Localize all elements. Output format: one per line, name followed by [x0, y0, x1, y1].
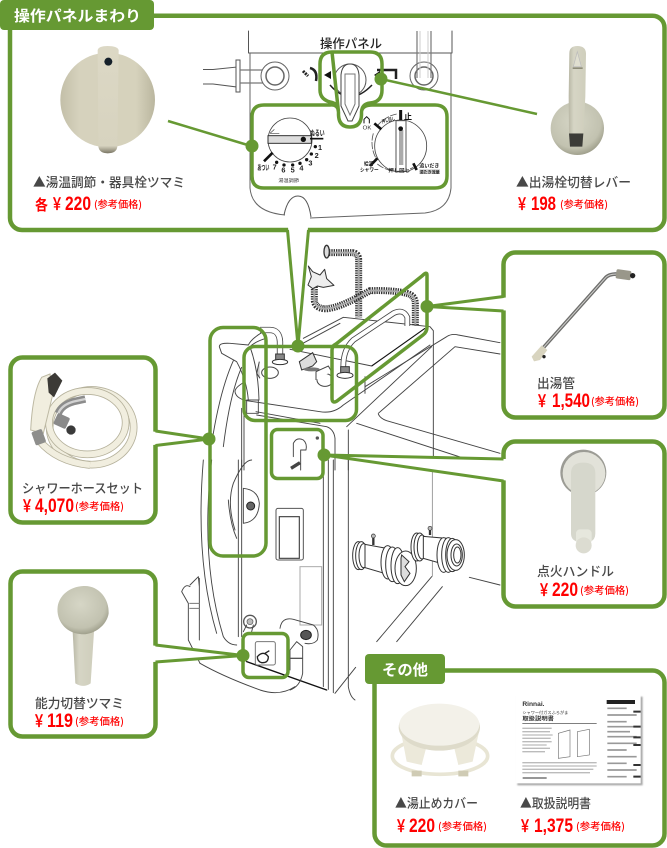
- connector dot: capacity switch: [236, 649, 250, 662]
- chart: temperature dial: 3: [308, 158, 312, 167]
- callout: highlight around capacity switch: [243, 634, 288, 678]
- connector dot: ignition handle: [318, 448, 330, 462]
- price: ignition handle: 220: [552, 579, 578, 601]
- price: temperature knob: [35, 190, 142, 215]
- panel: outlet pipe: [427, 252, 664, 418]
- price: ignition handle: ￥: [538, 576, 550, 601]
- chart: temperature dial: 湯温調節: [278, 177, 299, 184]
- icon: corrugated gas pipes: [308, 245, 415, 326]
- price: outlet lever: [516, 190, 608, 215]
- icon: shower hose photo: [31, 373, 134, 465]
- price: temperature knob: (参考価格): [94, 196, 142, 211]
- text: outlet lever label: ▲出湯栓切替レバー: [516, 172, 631, 191]
- chart: temperature dial: ぬるい: [310, 128, 325, 137]
- price: outlet pipe: (参考価格): [591, 393, 639, 408]
- price: cover: [395, 812, 487, 837]
- price: capacity switch: 119: [47, 710, 73, 732]
- diagram: control panel: 操作パネル: [320, 36, 382, 51]
- top of the heater: [212, 312, 500, 470]
- icon: instruction manual: シャワー付ガスふろがま: [522, 709, 568, 715]
- callout: highlight around outlet lever and dials: [252, 52, 447, 188]
- price: capacity switch: ￥: [33, 707, 45, 732]
- chart: function dial: 給湯: [364, 159, 374, 167]
- heading tab: others: その他: [382, 659, 428, 680]
- callout: highlight around ignition handle: [272, 430, 323, 478]
- chart: function dial: OK: [363, 125, 372, 131]
- chart: temperature dial: 1: [318, 143, 322, 152]
- icon: temperature knob photo: [60, 46, 155, 153]
- icon: capacity switch knob photo: [57, 586, 109, 686]
- icon: shower mark: [310, 68, 316, 81]
- price: ignition handle: (参考価格): [580, 582, 629, 597]
- icon: stopper cover photo: [392, 704, 488, 776]
- leader line: outlet lever: [381, 79, 537, 114]
- price: ignition handle: [538, 576, 629, 601]
- callout: highlight around knobs: [244, 346, 356, 420]
- price: cover: ￥: [395, 812, 407, 837]
- chart: function dial: 押し回し: [381, 115, 396, 125]
- price: manual: (参考価格): [576, 818, 625, 833]
- price: manual: [519, 812, 625, 837]
- text: outlet pipe label: 出湯管: [537, 373, 575, 392]
- text: capacity switch label: 能力切替ツマミ: [35, 693, 124, 712]
- price: outlet pipe: ￥: [536, 387, 548, 412]
- chart: temperature dial: 4: [299, 164, 304, 173]
- connector dot: outlet pipe: [420, 300, 434, 313]
- panel: ignition handle: [324, 442, 664, 606]
- chart: temperature dial: 2: [315, 151, 319, 160]
- chart: function dial: [360, 110, 440, 174]
- text: shower hose label: シャワーホースセット: [22, 478, 143, 497]
- price: capacity switch: (参考価格): [75, 713, 124, 728]
- price: capacity switch: [33, 707, 124, 732]
- chart: temperature dial: [257, 118, 325, 184]
- price: shower hose: 4,070: [35, 495, 74, 517]
- price: temperature knob: 220: [65, 193, 91, 215]
- price: outlet lever: (参考価格): [560, 196, 608, 211]
- heading tab: others: [365, 654, 445, 684]
- panel: others: [365, 654, 664, 846]
- text: manual label: ▲取扱説明書: [520, 793, 591, 812]
- panel: capacity switch knob: [10, 572, 243, 736]
- icon: instruction manual: [516, 695, 643, 785]
- price: outlet pipe: 1,540: [552, 390, 590, 412]
- connector dot: operation panel: [292, 340, 304, 352]
- text: ignition handle label: 点火ハンドル: [537, 561, 614, 580]
- chart: temperature dial: 5: [291, 166, 295, 175]
- price: outlet lever: 198: [531, 193, 556, 215]
- diagram: water heater line drawing: [182, 245, 500, 700]
- connector dot: shower hose: [202, 432, 216, 446]
- lower unit front: [182, 460, 500, 700]
- callout: highlight around shower hose: [210, 328, 266, 556]
- price: manual: ￥: [519, 812, 531, 837]
- price: shower hose: [21, 492, 124, 517]
- price: cover: (参考価格): [438, 818, 487, 833]
- chart: temperature dial: 6: [281, 166, 285, 175]
- price: manual: 1,375: [534, 815, 573, 837]
- price: shower hose: ￥: [21, 492, 33, 517]
- icon: outlet pipe photo: [532, 269, 635, 361]
- heading tab: operation panel: 操作パネルまわり: [14, 5, 141, 26]
- chart: temperature dial: 7: [273, 162, 277, 171]
- icon: instruction manual: 取扱説明書: [522, 715, 554, 723]
- text: cover label: ▲湯止めカバー: [395, 793, 478, 812]
- price: outlet lever: ￥: [516, 190, 528, 215]
- icon: ignition handle photo: [560, 450, 606, 553]
- price: cover: 220: [409, 815, 435, 837]
- panel: shower hose set: [10, 358, 209, 522]
- chart: function dial: 押し回し: [388, 167, 410, 174]
- chart: function dial: 追いだき: [419, 161, 439, 169]
- price: temperature knob: 各: [35, 194, 48, 215]
- price: temperature knob: ￥: [51, 190, 63, 215]
- icon: instruction manual: Rinnai.: [522, 701, 545, 708]
- chart: function dial: 止: [404, 111, 412, 121]
- text: temperature knob label: ▲湯温調節・器具栓ツマミ: [33, 172, 185, 191]
- icon: outlet lever on panel: [324, 64, 380, 121]
- diagram: control panel: [168, 31, 537, 218]
- price: outlet pipe: [536, 387, 639, 412]
- icon: right pipe fitting: [410, 31, 438, 90]
- icon: water and hot water pipe connectors: [353, 526, 464, 586]
- chart: function dial: シャワー: [360, 167, 379, 174]
- icon: left pipe fitting: [203, 60, 289, 92]
- heading tab: operation panel: [0, 0, 154, 30]
- icon: outlet lever photo: [551, 46, 604, 155]
- callout: highlight around outlet pipe: [332, 273, 427, 402]
- leader line: temperature knob: [168, 121, 251, 146]
- price: shower hose: (参考価格): [75, 498, 124, 513]
- icon: faucet mark: [377, 70, 396, 79]
- chart: function dial: 湯たき流量: [420, 168, 440, 174]
- chart: temperature dial: あつい: [257, 163, 269, 172]
